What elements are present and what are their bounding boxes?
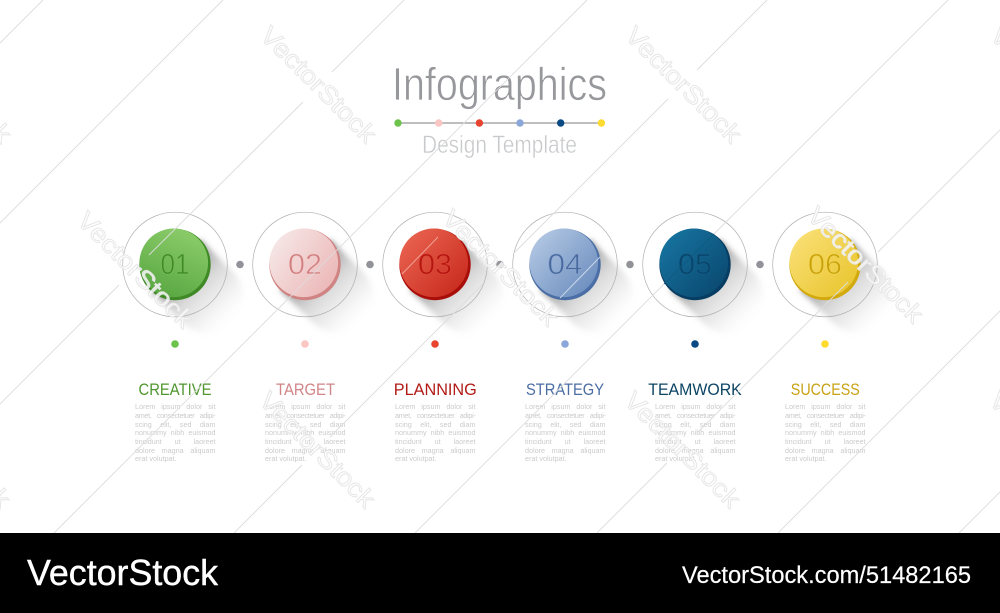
button 02 with ring and shadow: 02: [288, 249, 322, 281]
marker dot: [821, 340, 829, 348]
text block: scing elit, sed diam: [135, 420, 216, 429]
text block: amet, consectetuer adipi-: [395, 411, 476, 420]
text block: Lorem ipsum dolor sit: [785, 402, 866, 411]
watermark overlay: diagonal lines and repeated logo text: VectorStock: [254, 21, 382, 149]
button 05 with ring and shadow: [643, 212, 763, 333]
watermark overlay: diagonal lines and repeated logo text: VectorStock: [436, 204, 564, 332]
text block: tincidunt ut laoreet: [785, 437, 866, 446]
footer logo: VectorStock: VectorStock: [27, 552, 219, 593]
timeline with coloured dots: [394, 119, 605, 127]
marker dot: [301, 340, 309, 348]
text block: tincidunt ut laoreet: [265, 437, 346, 446]
connector dots between steps: [236, 260, 764, 268]
text block: scing elit, sed diam: [395, 420, 476, 429]
label: TARGET: TARGET: [276, 380, 335, 399]
text block: dolore magna aliquam: [135, 446, 216, 455]
text block: [785, 402, 866, 463]
text block: nonummy nibh euismod: [525, 428, 606, 437]
text block: Lorem ipsum dolor sit: [655, 402, 736, 411]
label: PLANNING: PLANNING: [394, 380, 477, 399]
text block: erat volutpat.: [265, 454, 307, 463]
text block: erat volutpat.: [525, 454, 567, 463]
text block: amet, consectetuer adipi-: [525, 411, 606, 420]
button 02 with ring and shadow: [253, 212, 373, 333]
panel: step 01 creative: [122, 212, 240, 463]
text block: erat volutpat.: [655, 454, 697, 463]
text block: [655, 402, 736, 463]
text block: Lorem ipsum dolor sit: [395, 402, 476, 411]
text block: scing elit, sed diam: [525, 420, 606, 429]
text block: nonummy nibh euismod: [785, 428, 866, 437]
watermark overlay: diagonal lines and repeated logo text: VectorStock: [71, 206, 199, 334]
button 01 with ring and shadow: 01: [160, 249, 190, 281]
panel: step 05 teamwork: [642, 212, 760, 463]
text block: dolore magna aliquam: [395, 446, 476, 455]
text block: nonummy nibh euismod: [135, 428, 216, 437]
text block: nonummy nibh euismod: [265, 428, 346, 437]
text block: scing elit, sed diam: [785, 420, 866, 429]
label: SUCCESS: SUCCESS: [791, 380, 860, 399]
text block: Lorem ipsum dolor sit: [135, 402, 216, 411]
text block: tincidunt ut laoreet: [655, 437, 736, 446]
text block: Lorem ipsum dolor sit: [525, 402, 606, 411]
text block: scing elit, sed diam: [265, 420, 346, 429]
panel: step 02 target: [252, 212, 370, 463]
title block: [392, 58, 607, 159]
text block: amet, consectetuer adipi-: [135, 411, 216, 420]
watermark overlay: diagonal lines and repeated logo text: VectorStock: [619, 21, 747, 149]
watermark overlay: diagonal lines and repeated logo text: VectorStock: [618, 386, 746, 514]
button 01 with ring and shadow: [123, 212, 243, 333]
text block: erat volutpat.: [135, 454, 177, 463]
button 04 with ring and shadow: [513, 212, 633, 333]
footer url: VectorStock.com/51482165: [682, 562, 971, 589]
button 03 with ring and shadow: [383, 212, 503, 333]
text block: dolore magna aliquam: [525, 446, 606, 455]
text block: nonummy nibh euismod: [655, 428, 736, 437]
text block: nonummy nibh euismod: [395, 428, 476, 437]
panel: step 06 success: [772, 212, 890, 463]
text block: erat volutpat.: [785, 454, 827, 463]
label: STRATEGY: STRATEGY: [526, 380, 604, 399]
button 06 with ring and shadow: 06: [808, 249, 842, 281]
text block: erat volutpat.: [395, 454, 437, 463]
button 04 with ring and shadow: 04: [548, 249, 582, 281]
watermark overlay: diagonal lines and repeated logo text: VectorStock: [253, 386, 381, 514]
button 06 with ring and shadow: [773, 212, 893, 333]
watermark overlay: diagonal lines and repeated logo text: VectorStock: [801, 201, 929, 329]
panel: step 03 planning: [382, 212, 500, 463]
text block: [265, 402, 346, 463]
label: TEAMWORK: TEAMWORK: [648, 380, 742, 399]
footer bar: [0, 533, 1000, 613]
text block: amet, consectetuer adipi-: [655, 411, 736, 420]
text block: [525, 402, 606, 463]
text block: tincidunt ut laoreet: [525, 437, 606, 446]
text block: dolore magna aliquam: [655, 446, 736, 455]
label: CREATIVE: CREATIVE: [138, 380, 212, 399]
subtitle: Design Template: Design Template: [422, 131, 577, 159]
text block: Lorem ipsum dolor sit: [265, 402, 346, 411]
text block: [395, 402, 476, 463]
text block: dolore magna aliquam: [265, 446, 346, 455]
button 05 with ring and shadow: 05: [678, 249, 712, 281]
panel: step 04 strategy: [512, 212, 630, 463]
marker dot: [561, 340, 569, 348]
text block: [135, 402, 216, 463]
button 03 with ring and shadow: 03: [418, 249, 452, 281]
text block: amet, consectetuer adipi-: [785, 411, 866, 420]
marker dot: [691, 340, 699, 348]
text block: amet, consectetuer adipi-: [265, 411, 346, 420]
marker dot: [171, 340, 179, 348]
text block: scing elit, sed diam: [655, 420, 736, 429]
text block: tincidunt ut laoreet: [395, 437, 476, 446]
marker dot: [431, 340, 439, 348]
text block: dolore magna aliquam: [785, 446, 866, 455]
text block: tincidunt ut laoreet: [135, 437, 216, 446]
